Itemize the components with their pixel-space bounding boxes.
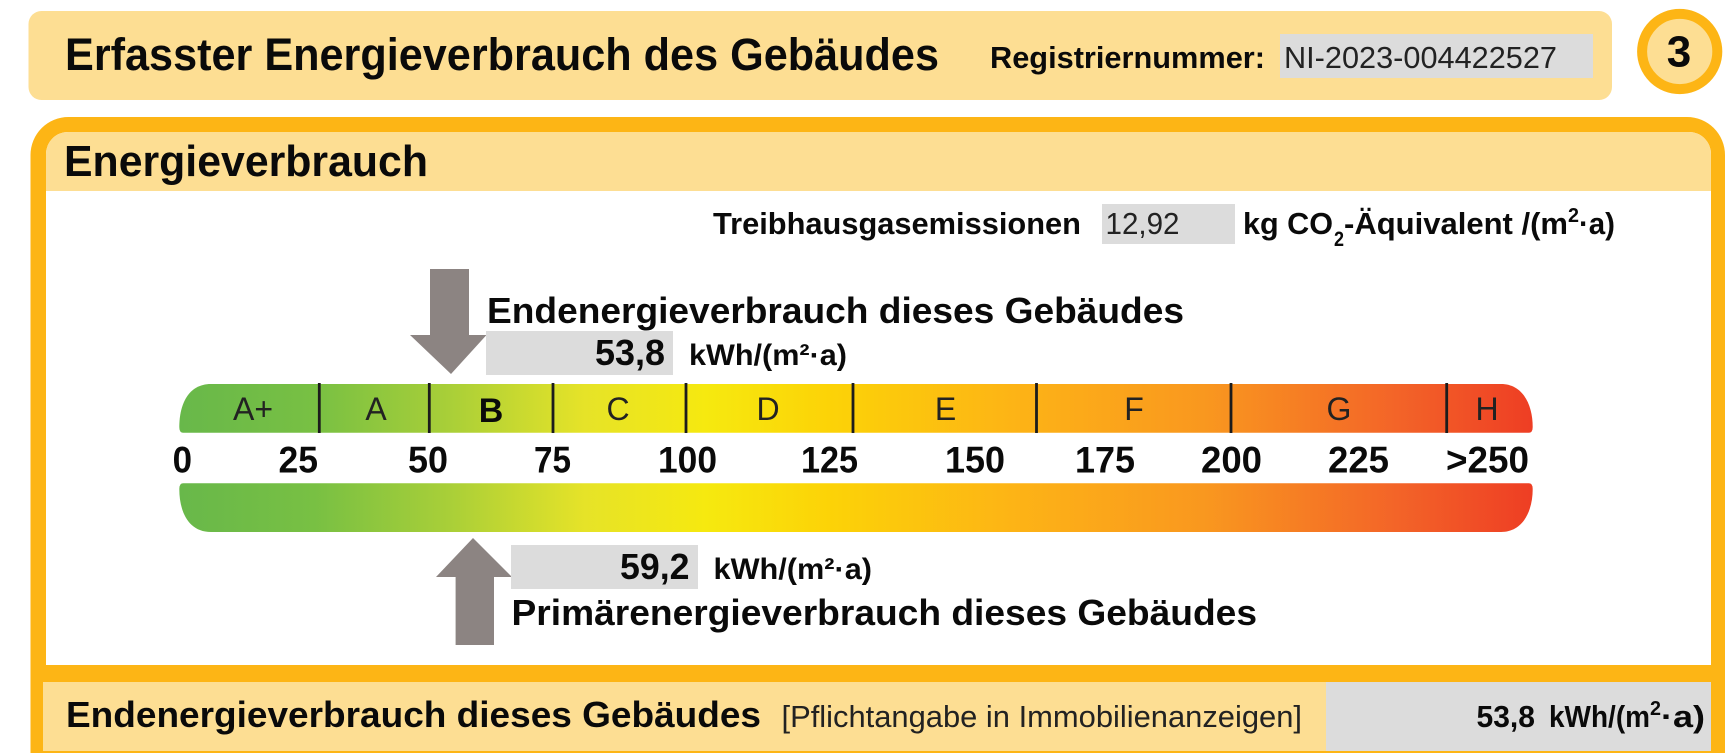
class letters: A+ — [233, 391, 273, 427]
page number badge — [1642, 14, 1717, 89]
primary energy value: kWh/(m²·a) — [714, 553, 872, 586]
arrow: final energy marker — [410, 269, 486, 374]
class letters: E — [935, 391, 956, 427]
scale numbers: 200 — [1201, 440, 1262, 480]
footer row: mandatory final energy — [43, 682, 1711, 751]
footer row: mandatory final energy: 2 — [1650, 698, 1661, 720]
scale numbers: 175 — [1075, 440, 1135, 480]
scale numbers: 125 — [801, 440, 858, 480]
final energy value — [486, 331, 847, 375]
page number badge: 3 — [1667, 28, 1691, 76]
footer row: mandatory final energy: 53,8 — [1476, 699, 1535, 734]
class letters: B — [479, 392, 503, 430]
class letters: H — [1475, 391, 1499, 427]
class letters — [233, 391, 1499, 430]
registration number label: Registriernummer: — [990, 41, 1265, 75]
footer row: mandatory final energy: kWh/(m — [1549, 699, 1650, 734]
greenhouse gas emissions row: 12,92 — [1106, 207, 1180, 241]
primary energy value — [511, 545, 872, 589]
greenhouse gas emissions row: Treibhausgasemissionen — [713, 207, 1081, 241]
header bar — [28, 11, 1612, 100]
footer row: mandatory final energy: ·a) — [1661, 699, 1705, 734]
greenhouse gas emissions row — [713, 204, 1615, 251]
panel heading band: Energieverbrauch — [64, 137, 428, 186]
final energy value: 53,8 — [595, 332, 665, 373]
title: Erfasster Energieverbrauch des Gebäudes — [65, 29, 939, 80]
scale numbers — [173, 440, 1529, 480]
scale bar: final energy with classes — [179, 383, 1533, 433]
final energy value: kWh/(m²·a) — [689, 339, 847, 372]
registration number field: NI-2023-004422527 — [1284, 40, 1557, 75]
scale numbers: 225 — [1328, 440, 1389, 480]
greenhouse gas emissions row: ·a) — [1579, 207, 1615, 241]
greenhouse gas emissions row: 2 — [1334, 228, 1344, 251]
class letters: D — [756, 391, 780, 427]
footer row: mandatory final energy: Endenergieverbrauch dieses Gebäudes — [66, 694, 761, 735]
scale numbers: 150 — [945, 440, 1005, 480]
scale numbers: 75 — [534, 440, 571, 480]
scale numbers: 50 — [408, 440, 448, 480]
class letters: A — [365, 391, 387, 427]
arrow: primary energy marker — [436, 538, 512, 645]
scale numbers: 100 — [658, 440, 717, 480]
class letters: G — [1327, 391, 1351, 427]
class letters: F — [1124, 391, 1144, 427]
primary energy value: 59,2 — [620, 546, 690, 587]
scale numbers: 25 — [278, 440, 318, 480]
class letters: C — [606, 391, 630, 427]
scale bar: primary energy — [179, 483, 1533, 532]
footer row: mandatory final energy: [Pflichtangabe in Immobilienanzeigen] — [782, 699, 1302, 734]
greenhouse gas emissions row: kg CO — [1243, 207, 1333, 241]
greenhouse gas emissions row: 2 — [1568, 205, 1579, 227]
scale numbers: >250 — [1446, 440, 1529, 480]
greenhouse gas emissions row: -Äquivalent /(m — [1344, 207, 1568, 241]
panel heading band — [46, 132, 1711, 191]
scale numbers: 0 — [173, 440, 192, 480]
final energy heading: Endenergieverbrauch dieses Gebäudes — [487, 290, 1184, 331]
primary energy heading: Primärenergieverbrauch dieses Gebäudes — [512, 592, 1257, 633]
